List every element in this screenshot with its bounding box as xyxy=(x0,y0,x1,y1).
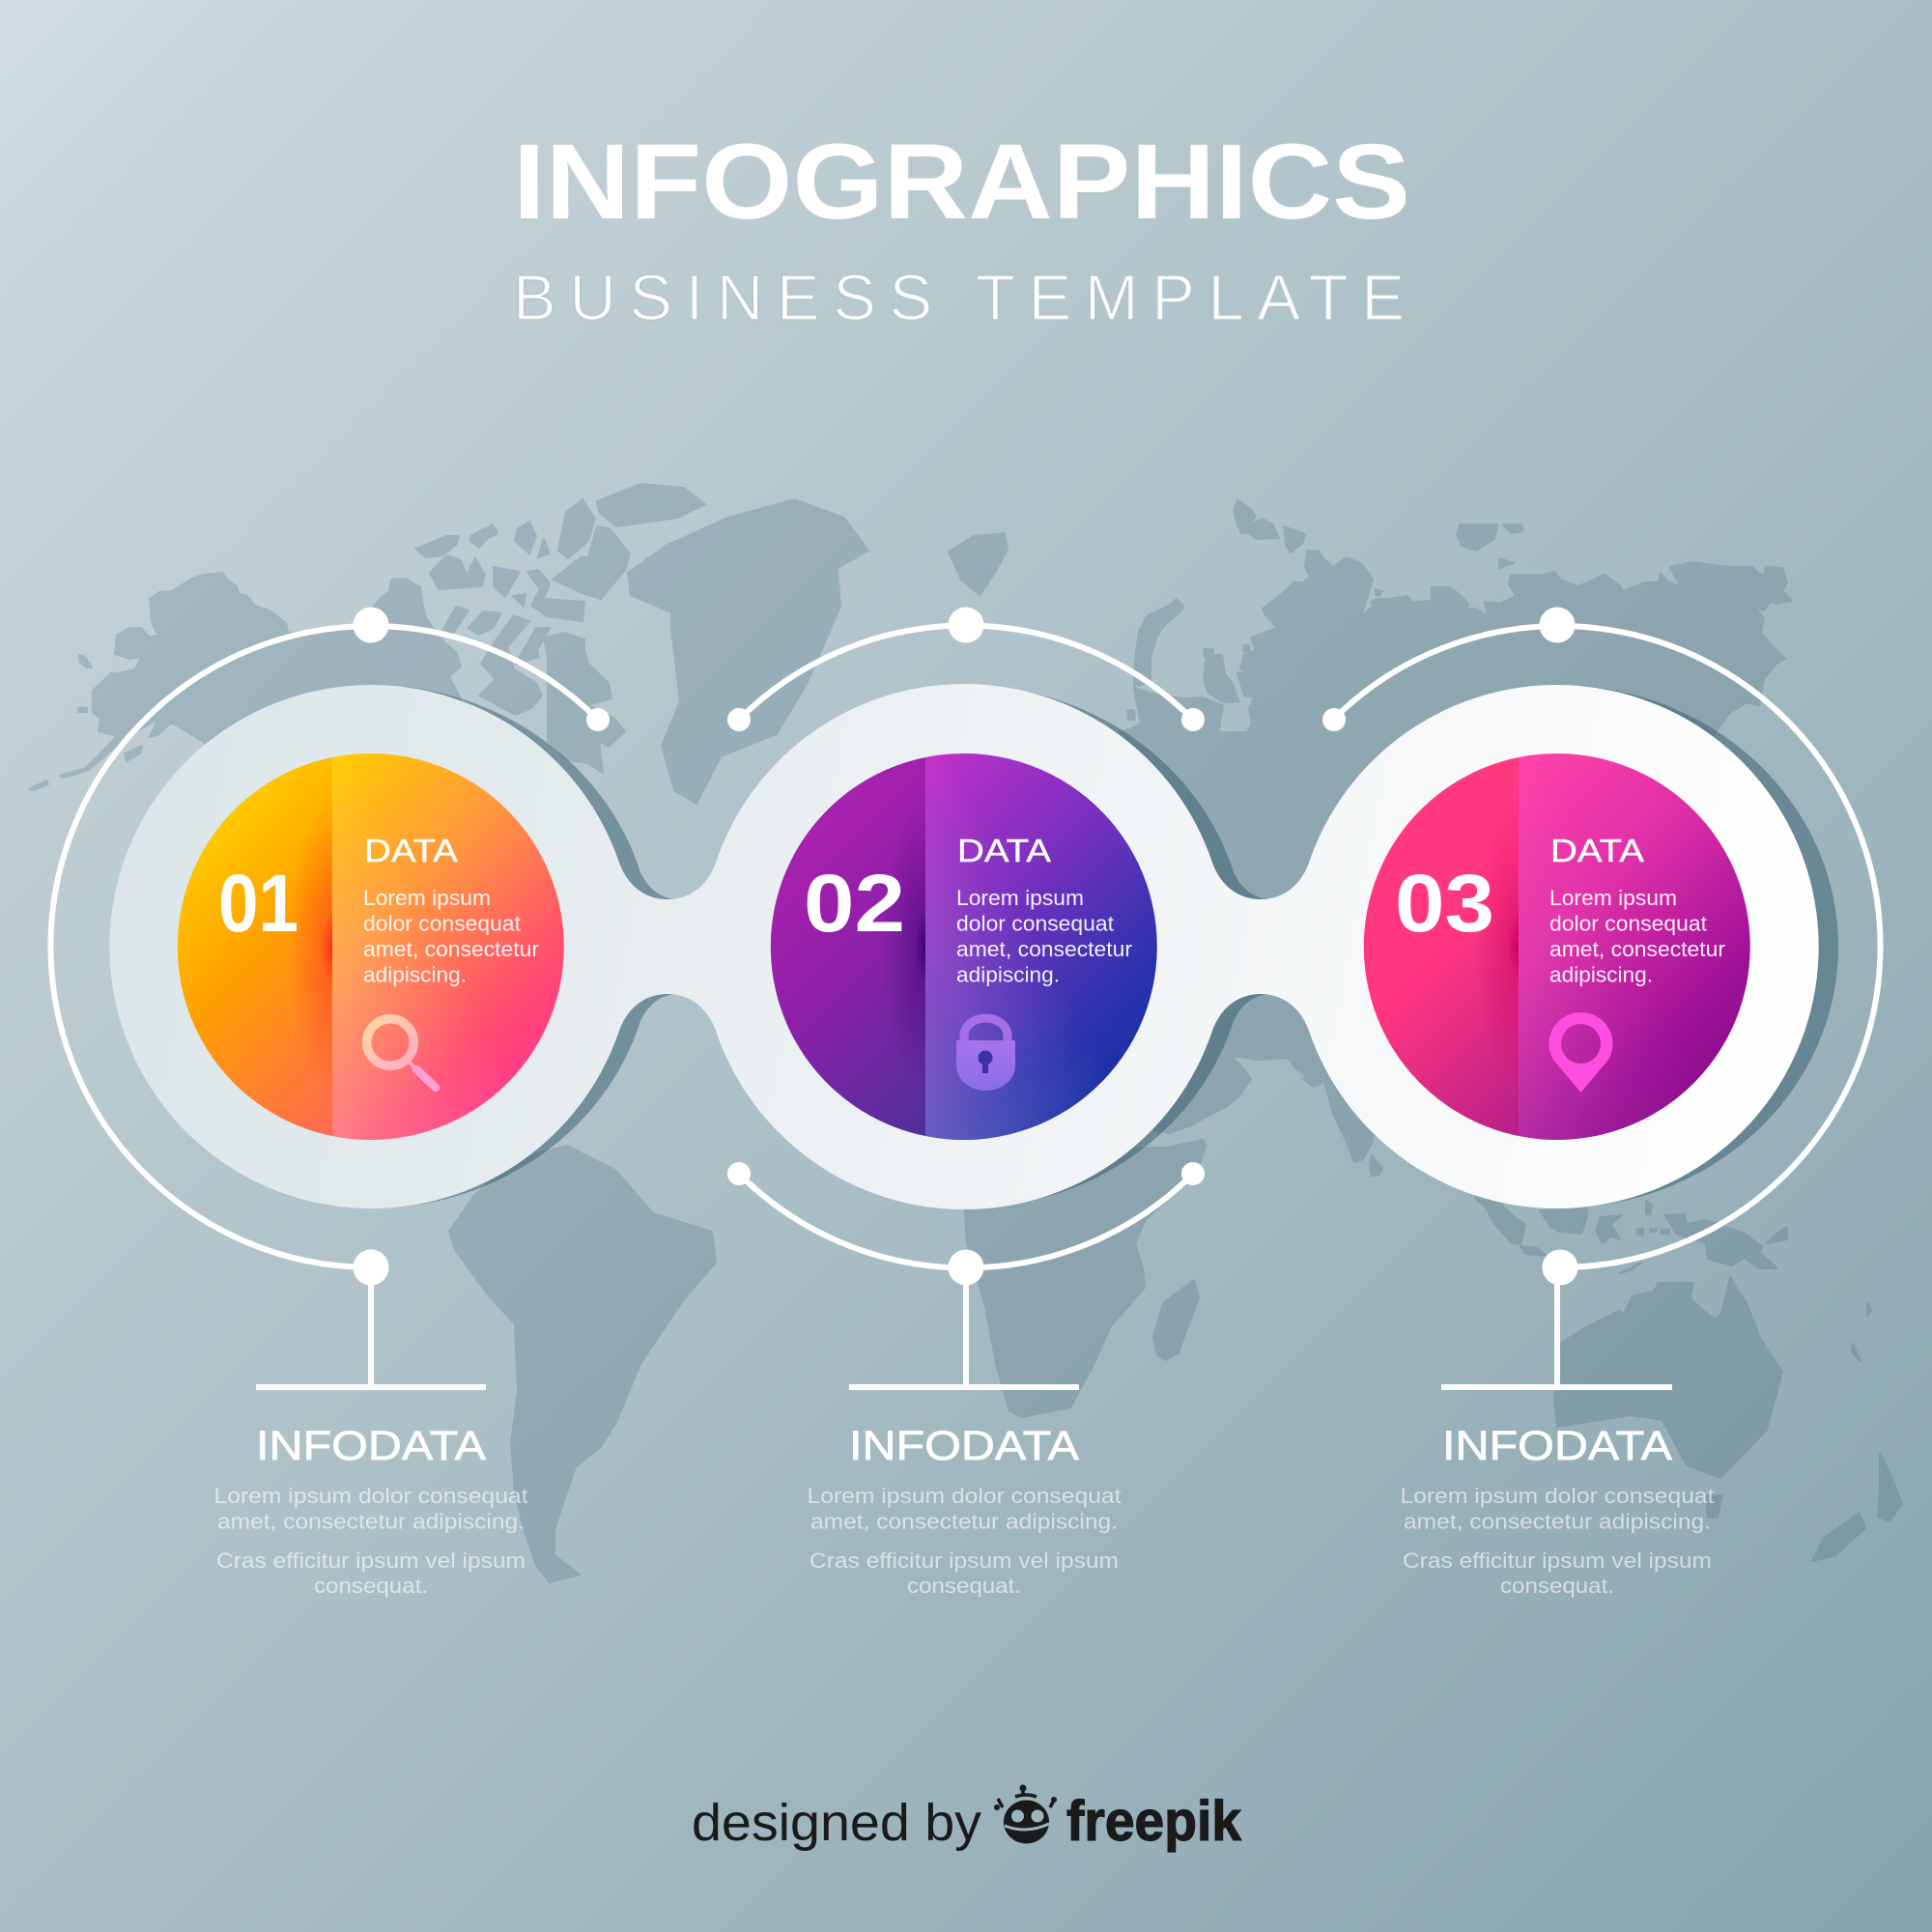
description: Cras efficitur ipsum vel ipsum xyxy=(810,1548,1119,1573)
text block: amet, consectetur xyxy=(363,937,539,961)
description: Lorem ipsum dolor consequat xyxy=(214,1484,527,1508)
number 02: 02 xyxy=(804,858,905,949)
text block: dolor consequat xyxy=(363,912,521,935)
info block 1 xyxy=(214,1285,527,1598)
text block xyxy=(956,886,1132,987)
info block 2 xyxy=(808,1285,1121,1598)
text block: dolor consequat xyxy=(1549,912,1707,935)
description: amet, consectetur adipiscing. xyxy=(217,1509,525,1534)
text block: adipiscing. xyxy=(956,962,1060,987)
text block xyxy=(1549,886,1725,987)
world map xyxy=(29,484,1902,1582)
connector wires xyxy=(50,626,1881,1267)
text block: adipiscing. xyxy=(1549,962,1653,987)
text block: Lorem ipsum xyxy=(1549,886,1677,910)
description: amet, consectetur adipiscing. xyxy=(1404,1509,1711,1534)
title: INFOGRAPHICS xyxy=(513,123,1410,242)
text block xyxy=(363,886,539,987)
heading: data: DATA xyxy=(1550,834,1645,869)
chain shadow xyxy=(371,685,1838,1208)
text block: amet, consectetur xyxy=(956,937,1132,961)
description: Lorem ipsum dolor consequat xyxy=(1401,1484,1714,1508)
heading: infodata: INFODATA xyxy=(256,1423,486,1469)
number 01: 01 xyxy=(218,858,298,949)
panel: step 01 xyxy=(178,753,564,1140)
footer credit: designed by xyxy=(692,1794,981,1852)
text block: amet, consectetur xyxy=(1549,937,1725,961)
footer credit xyxy=(692,1785,1242,1853)
icon: freepik logo xyxy=(994,1785,1057,1843)
description xyxy=(214,1484,527,1598)
wire dots xyxy=(354,607,1578,1285)
chain shape xyxy=(109,684,1819,1209)
heading: data: DATA xyxy=(957,834,1052,869)
description: consequat. xyxy=(1500,1574,1614,1598)
text block: dolor consequat xyxy=(956,912,1114,935)
description xyxy=(808,1484,1121,1598)
subtitle: BUSINESS TEMPLATE xyxy=(513,262,1405,334)
description: consequat. xyxy=(314,1574,428,1598)
icon: magnifier xyxy=(367,1019,436,1088)
panel: step 03 xyxy=(1364,753,1750,1140)
footer credit: freepik xyxy=(1066,1790,1242,1853)
number 03: 03 xyxy=(1395,858,1494,949)
text block: Lorem ipsum xyxy=(956,886,1084,910)
description: amet, consectetur adipiscing. xyxy=(810,1509,1118,1534)
description xyxy=(1401,1484,1714,1598)
text block: adipiscing. xyxy=(363,962,467,987)
info block 3 xyxy=(1401,1285,1714,1598)
icon: padlock xyxy=(956,1018,1015,1091)
heading: infodata: INFODATA xyxy=(1442,1423,1672,1469)
description: consequat. xyxy=(907,1574,1021,1598)
description: Cras efficitur ipsum vel ipsum xyxy=(1403,1548,1712,1573)
description: Lorem ipsum dolor consequat xyxy=(808,1484,1121,1508)
description: Cras efficitur ipsum vel ipsum xyxy=(216,1548,526,1573)
heading: infodata: INFODATA xyxy=(849,1423,1079,1469)
icon: map pin xyxy=(1548,1012,1613,1093)
panel: step 02 xyxy=(771,753,1157,1140)
heading: data: DATA xyxy=(364,834,459,869)
text block: Lorem ipsum xyxy=(363,886,491,910)
